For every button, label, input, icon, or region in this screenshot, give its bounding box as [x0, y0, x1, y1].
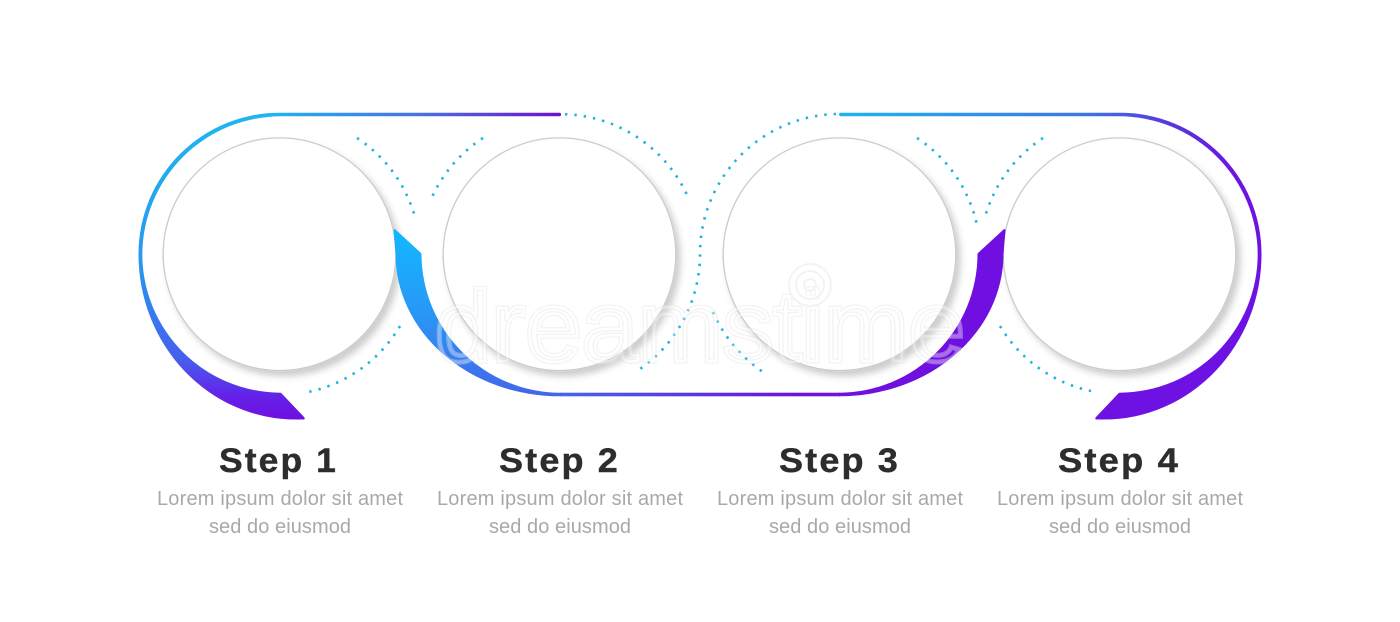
step 1 label — [157, 442, 403, 538]
step 4 label — [997, 442, 1243, 538]
step 2 label: Step 2 — [499, 442, 620, 480]
step 3 label — [717, 442, 963, 538]
step 3 label: Step 3 — [779, 442, 900, 480]
step 2 label: Lorem ipsum dolor sit amet — [437, 488, 683, 510]
step 1 label: sed do eiusmod — [209, 516, 351, 538]
step 2 label — [437, 442, 683, 538]
circle: step 1 — [163, 138, 396, 370]
arrow: step 1 track — [138, 113, 561, 420]
watermark: dreamstime — [435, 271, 965, 383]
circle: step 3 — [723, 138, 956, 370]
step 4 label: Step 4 — [1058, 442, 1180, 480]
circle: step 4 — [1003, 138, 1236, 370]
step 4 label: Lorem ipsum dolor sit amet — [997, 488, 1243, 510]
dotted connector arcs — [303, 114, 1091, 393]
circle: step 2 — [443, 138, 676, 370]
arrow: step 4 track — [839, 113, 1262, 419]
arrow: step 2 and 3 track — [394, 229, 1006, 396]
step 1 label: Step 1 — [219, 442, 338, 480]
step 1 label: Lorem ipsum dolor sit amet — [157, 488, 403, 510]
step 2 label: sed do eiusmod — [489, 516, 631, 538]
step 3 label: Lorem ipsum dolor sit amet — [717, 488, 963, 510]
step 3 label: sed do eiusmod — [769, 516, 911, 538]
watermark: dreamstime — [435, 271, 965, 383]
step 4 label: sed do eiusmod — [1049, 516, 1191, 538]
